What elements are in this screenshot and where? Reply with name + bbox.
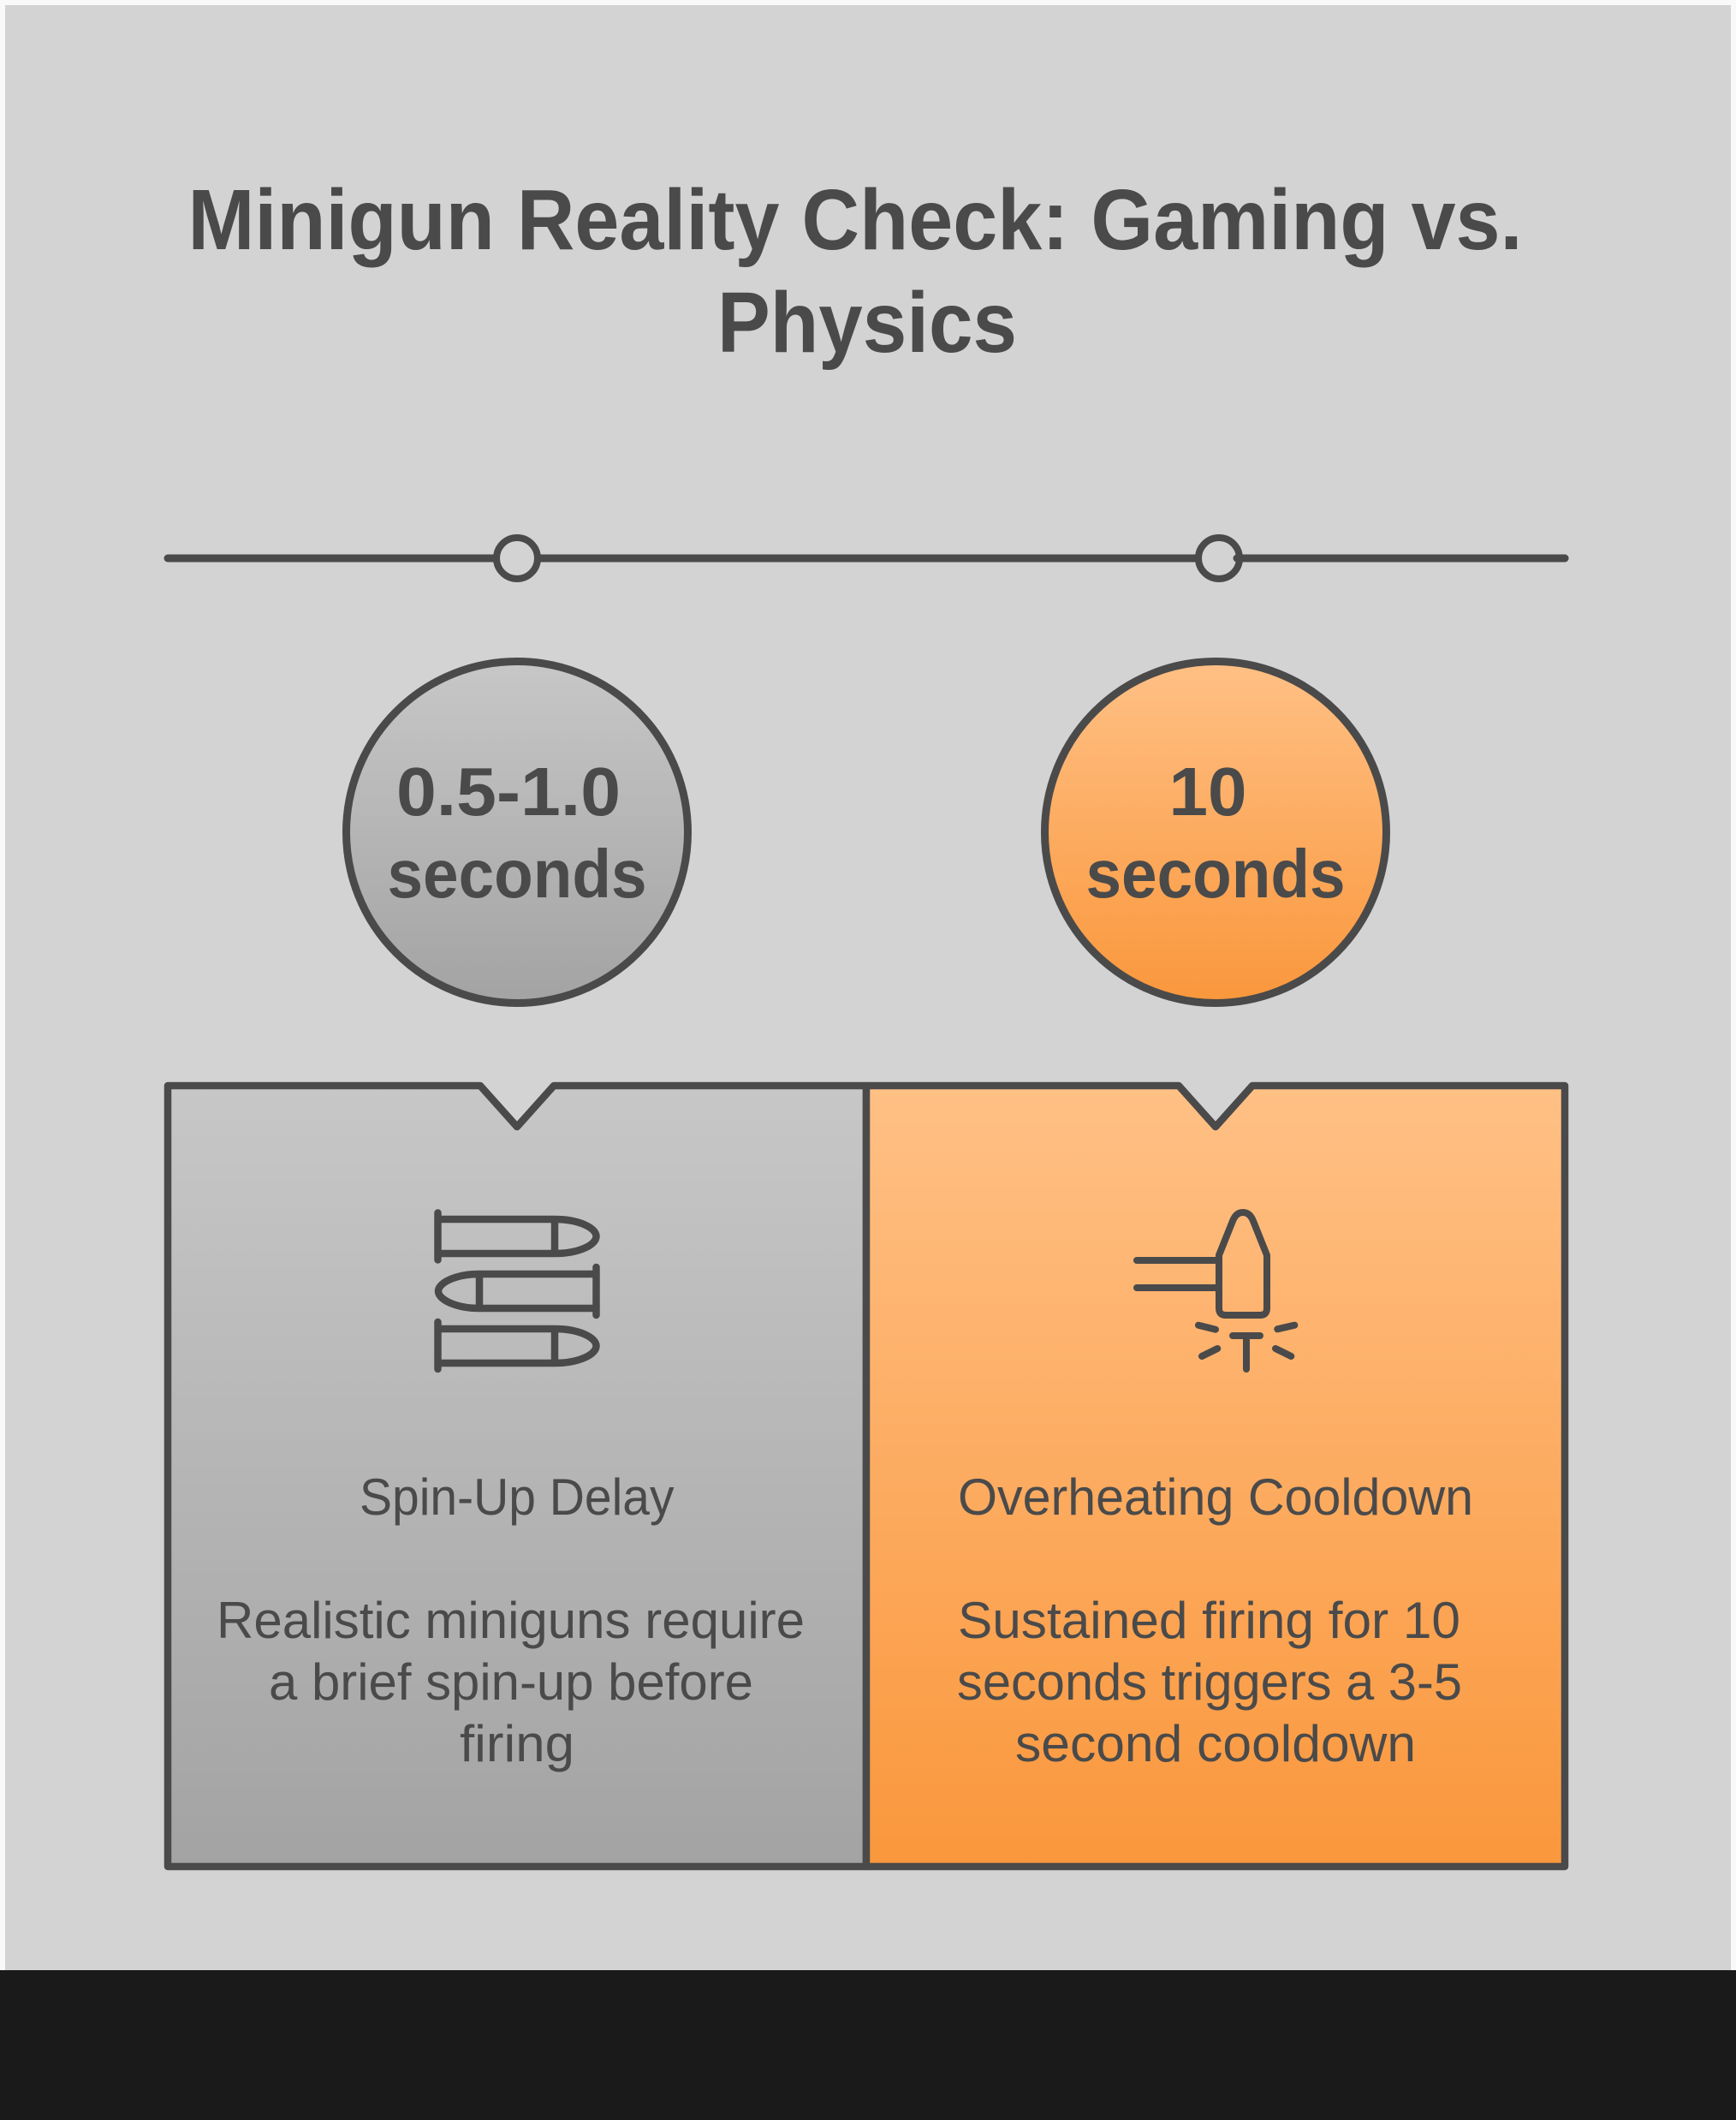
description: overheating: [957, 1592, 1462, 1772]
description: spin-up: firing: [460, 1715, 574, 1772]
title: [188, 172, 1522, 371]
label: Spin-Up Delay: Spin-Up Delay: [360, 1468, 675, 1526]
stat circle: 0.5-1.0 seconds: [346, 661, 688, 1003]
stat circle: 10 seconds: [1044, 661, 1387, 1003]
bottom black band: [0, 1970, 1736, 2120]
label: Overheating Cooldown: Overheating Cooldown: [958, 1468, 1473, 1526]
description: spin-up: Realistic miniguns require: [217, 1592, 805, 1649]
icon: three bullets: [438, 1212, 596, 1369]
stat circle: 0.5-1.0 seconds: 0.5-1.0: [396, 753, 621, 830]
panel: spin-up delay: [168, 1086, 866, 1867]
description: spin-up: [217, 1592, 805, 1772]
title: Physics: [717, 275, 1017, 371]
description: overheating: Sustained firing for 10: [958, 1592, 1460, 1649]
timeline: [168, 538, 1565, 579]
timeline marker: overheating: [1198, 538, 1240, 579]
description: spin-up: a brief spin-up before: [269, 1653, 753, 1711]
stat circle: 10 seconds: seconds: [1085, 836, 1346, 912]
title: Minigun Reality Check: Gaming vs.: [188, 172, 1522, 268]
stat circle: 0.5-1.0 seconds: seconds: [387, 836, 647, 912]
description: overheating: second cooldown: [1015, 1715, 1416, 1772]
panel: overheating cooldown: [866, 1086, 1565, 1867]
description: overheating: seconds triggers a 3-5: [957, 1653, 1462, 1711]
stat circle: 10 seconds: 10: [1169, 753, 1246, 830]
timeline marker: spin-up: [496, 538, 538, 579]
icon: overheating bullet: [1137, 1212, 1294, 1369]
